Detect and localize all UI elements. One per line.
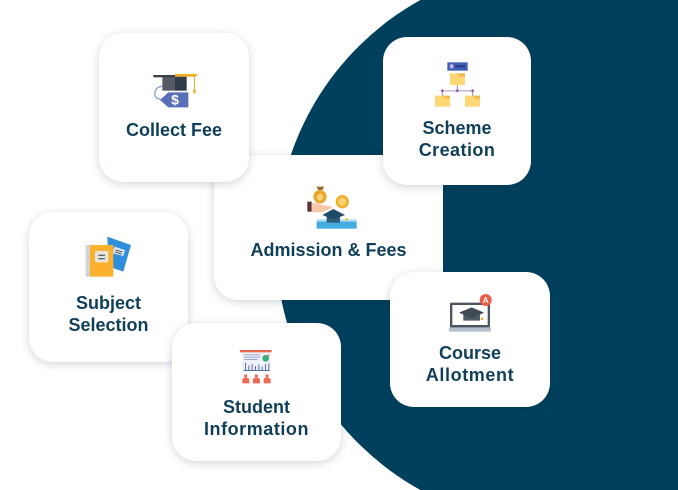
label: Collect Fee [126, 120, 222, 140]
label: Selection [68, 314, 149, 334]
label: Student [223, 397, 290, 417]
icon: money and graduation cap [307, 186, 357, 229]
label: Scheme [422, 118, 492, 138]
panel: Scheme Creation [383, 37, 531, 185]
label: Admission & Fees [250, 240, 407, 260]
panel: Student Information [172, 323, 341, 461]
label: Allotment [426, 365, 514, 385]
icon: notebooks [86, 236, 131, 277]
label: Creation [419, 140, 495, 160]
panel: Collect Fee [99, 33, 249, 182]
icon: hierarchy of folders [435, 62, 480, 107]
icon: presentation board with students [240, 350, 272, 384]
icon: graduation cap and price tag: $ [171, 92, 179, 108]
panel: Course Allotment [390, 272, 550, 407]
label [419, 118, 495, 160]
icon: laptop with graduation cap [449, 294, 492, 332]
label [426, 343, 514, 385]
icon: laptop with graduation cap: A [483, 295, 489, 305]
label [68, 293, 149, 334]
panel: Subject Selection [29, 212, 188, 362]
label: Subject [76, 293, 141, 313]
panel: Admission & Fees [214, 155, 443, 300]
label: Course [439, 343, 501, 363]
label [204, 397, 309, 439]
icon: graduation cap and price tag [153, 74, 197, 108]
label: Information [204, 419, 309, 439]
